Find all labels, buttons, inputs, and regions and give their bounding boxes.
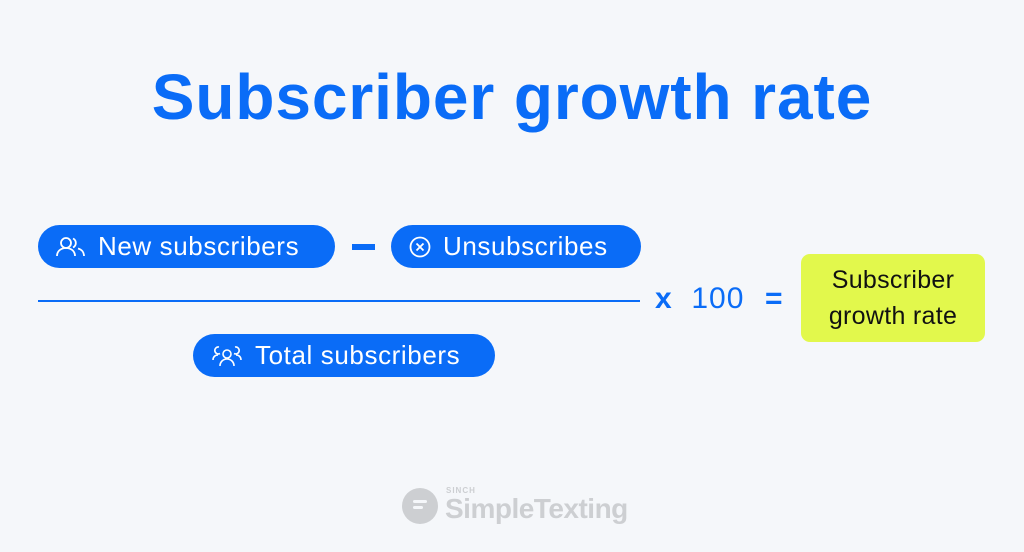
pill: unsubscribes: Unsubscribes	[443, 231, 608, 261]
pill: new subscribers	[38, 225, 335, 268]
title: Subscriber growth rate	[152, 61, 872, 133]
icon: logo bubble	[402, 488, 438, 524]
multiply by 100: x 100	[655, 282, 744, 315]
pill: total subscribers	[193, 334, 495, 377]
logo: SINCH	[446, 486, 476, 495]
pill: unsubscribes	[391, 225, 641, 268]
result box	[801, 254, 985, 342]
minus sign	[352, 244, 375, 250]
result box: growth rate	[829, 302, 957, 330]
pill: total subscribers: Total subscribers	[255, 340, 460, 370]
logo: SimpleTexting	[445, 493, 628, 524]
logo	[402, 486, 628, 524]
pill: new subscribers: New subscribers	[98, 231, 299, 261]
fraction line	[38, 300, 640, 302]
equals sign: =	[765, 282, 783, 315]
result box: Subscriber	[832, 266, 954, 294]
